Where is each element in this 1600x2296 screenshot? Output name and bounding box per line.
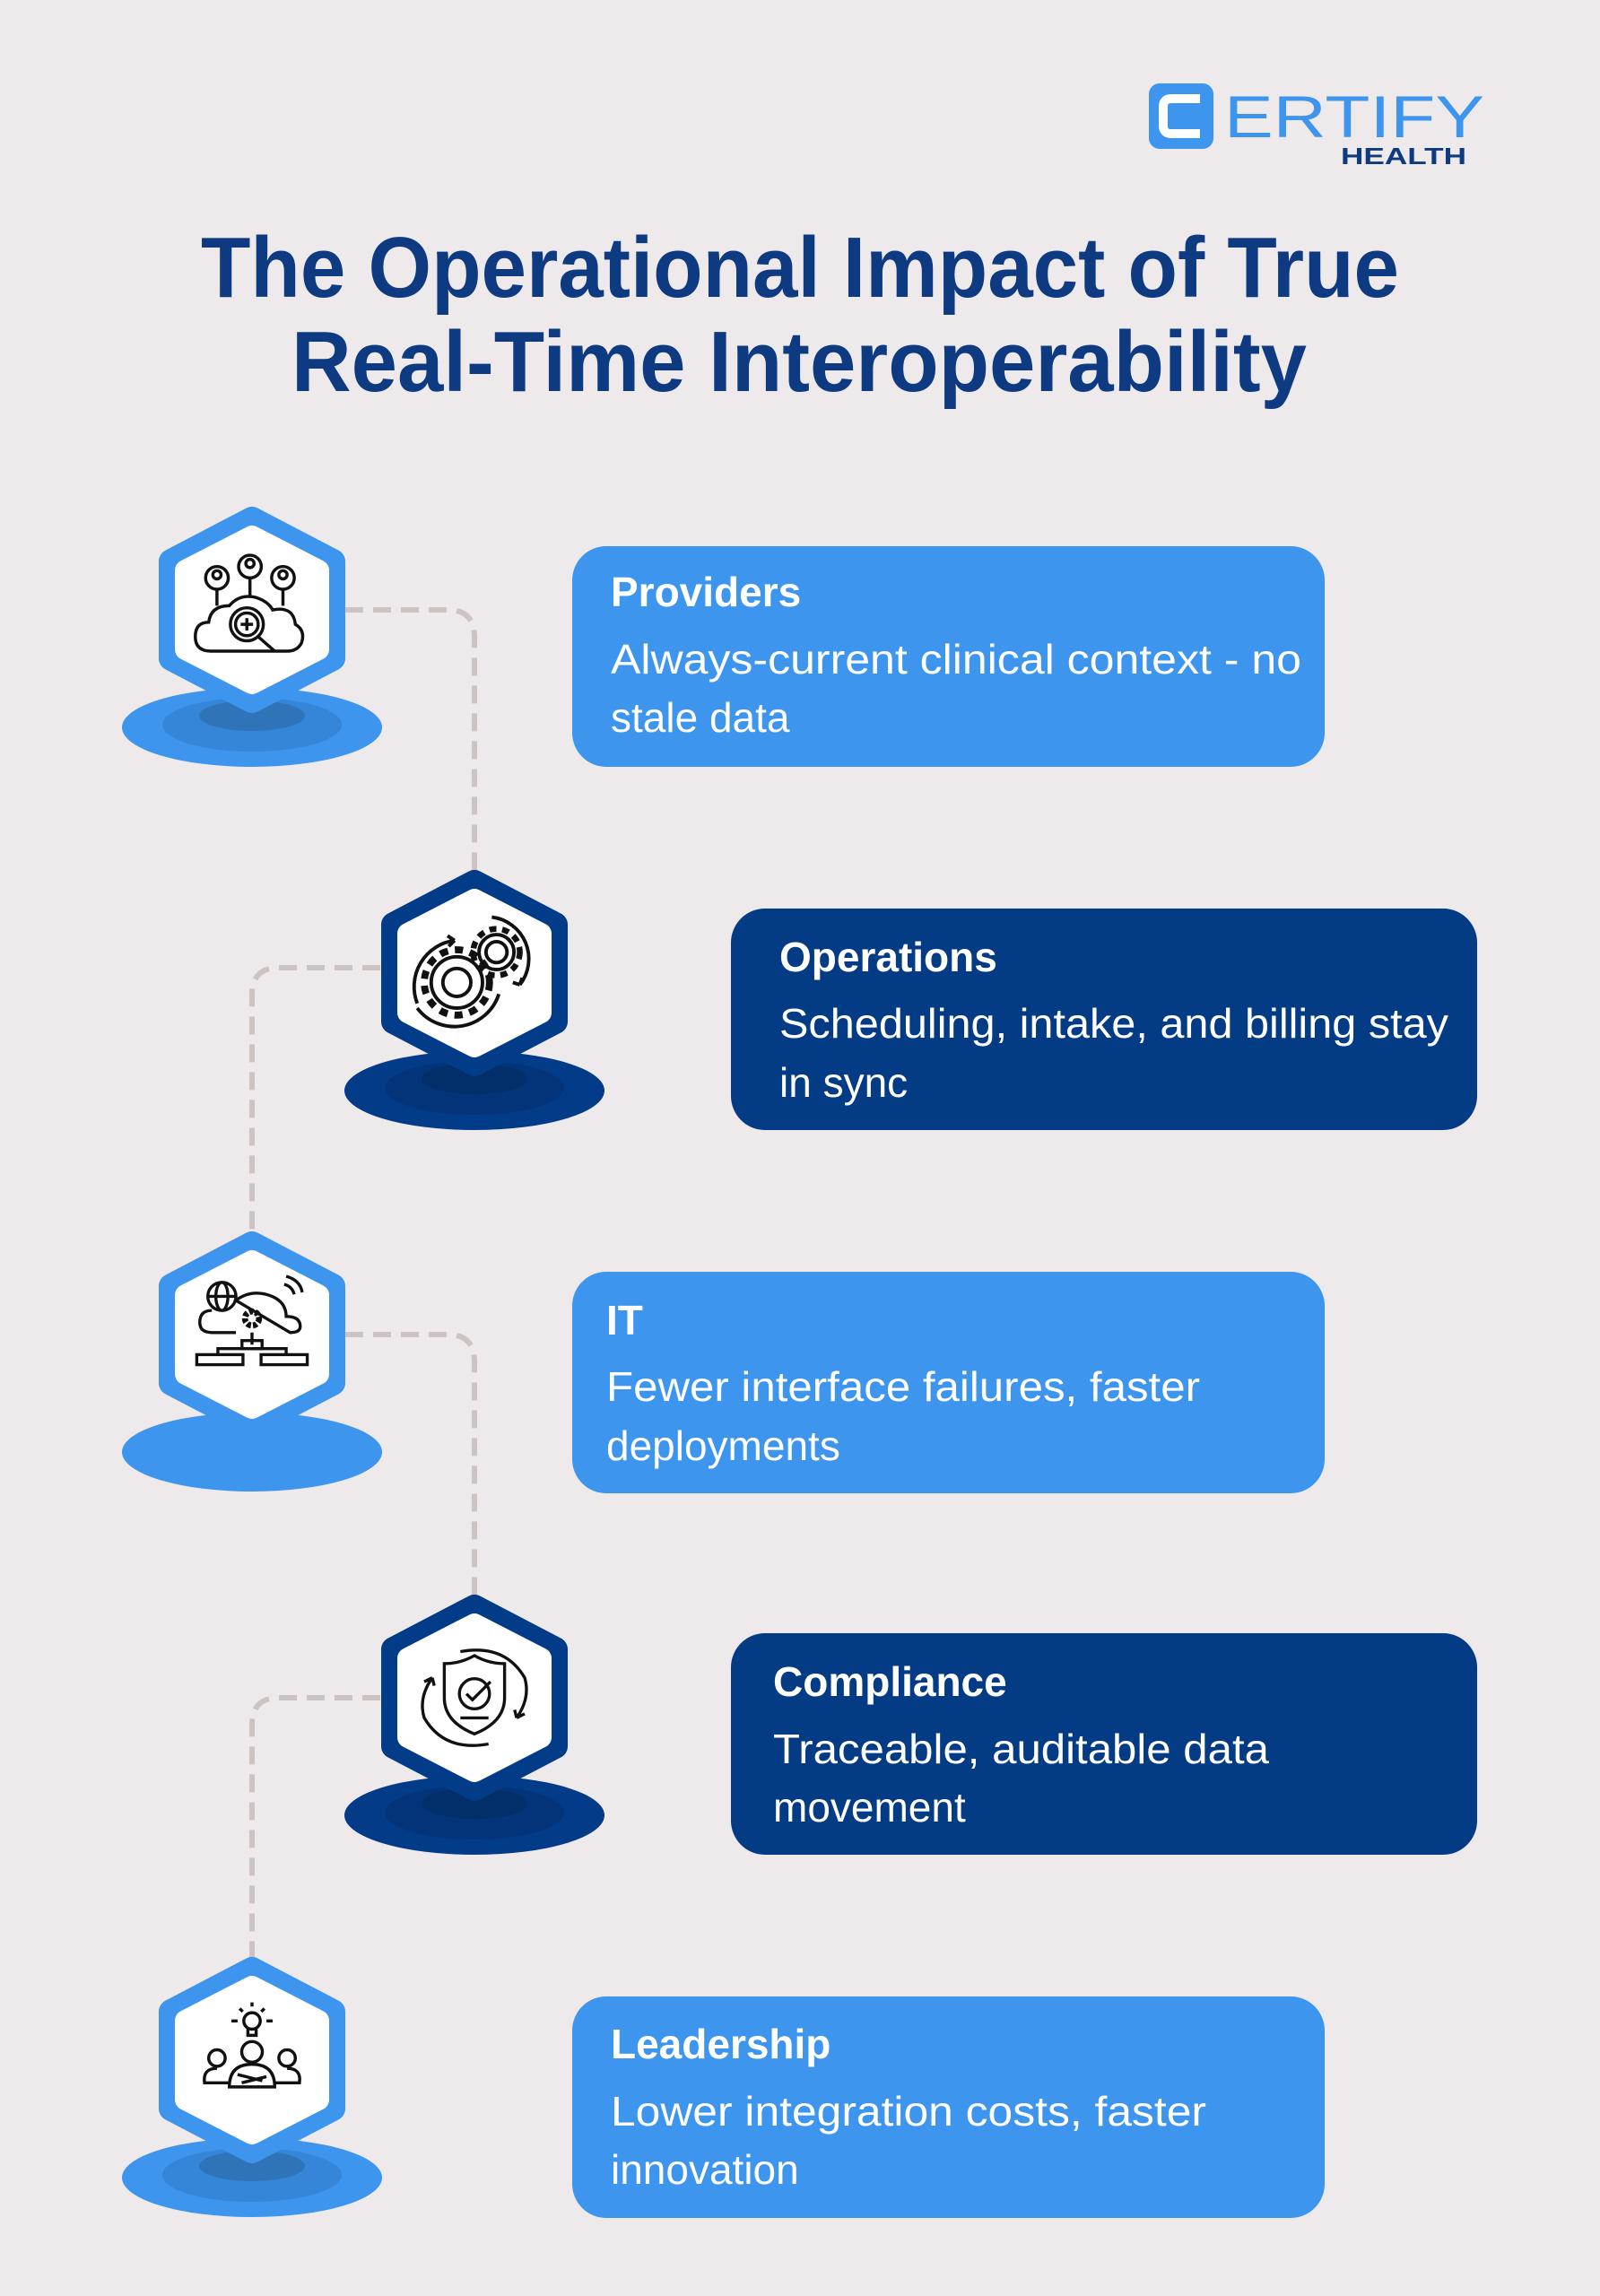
card: Providers: stale data xyxy=(611,694,790,741)
icon: people cloud search xyxy=(196,555,303,651)
node 3: IT icon xyxy=(122,1244,382,1492)
card: Compliance: movement xyxy=(773,1784,966,1831)
icon: cloud network xyxy=(196,1276,308,1365)
logo: Certify Health: HEALTH xyxy=(1341,143,1466,170)
card: Operations: Scheduling, intake, and billing stay xyxy=(779,1000,1448,1047)
node 1: providers icon xyxy=(122,519,382,767)
card: Leadership xyxy=(572,1996,1325,2218)
node 2: operations icon xyxy=(344,883,604,1130)
card: Operations: Operations xyxy=(779,934,997,980)
card: Providers: Providers xyxy=(611,569,801,615)
card: IT: Fewer interface failures, faster xyxy=(606,1363,1200,1410)
card: Leadership: innovation xyxy=(611,2146,799,2193)
card: Operations xyxy=(731,909,1477,1130)
node 5: leadership icon xyxy=(122,1970,382,2217)
title: The Operational Impact of True xyxy=(201,220,1399,316)
icon: shield with check xyxy=(422,1650,526,1745)
node 4: compliance icon xyxy=(344,1607,604,1855)
card: Compliance xyxy=(731,1633,1477,1855)
card: Providers: Always-current clinical context - no xyxy=(611,636,1301,683)
card: Compliance: Traceable, auditable data xyxy=(773,1726,1269,1772)
card: Compliance: Compliance xyxy=(773,1658,1007,1705)
card: Leadership: Leadership xyxy=(611,2021,830,2067)
icon: leader with lightbulb xyxy=(204,2003,300,2087)
card: Operations: in sync xyxy=(779,1059,908,1106)
title xyxy=(201,220,1399,410)
title: Real-Time Interoperability xyxy=(291,314,1307,410)
card: IT xyxy=(572,1272,1325,1493)
logo: Certify Health xyxy=(1149,83,1484,170)
icon: gears xyxy=(414,918,529,1027)
card: IT: deployments xyxy=(606,1422,840,1469)
dashed connectors xyxy=(252,610,474,1960)
card: IT: IT xyxy=(606,1297,643,1344)
card: Leadership: Lower integration costs, faster xyxy=(611,2088,1206,2135)
logo: Certify Health: ERTIFY xyxy=(1224,83,1484,150)
card: Providers xyxy=(572,546,1325,767)
